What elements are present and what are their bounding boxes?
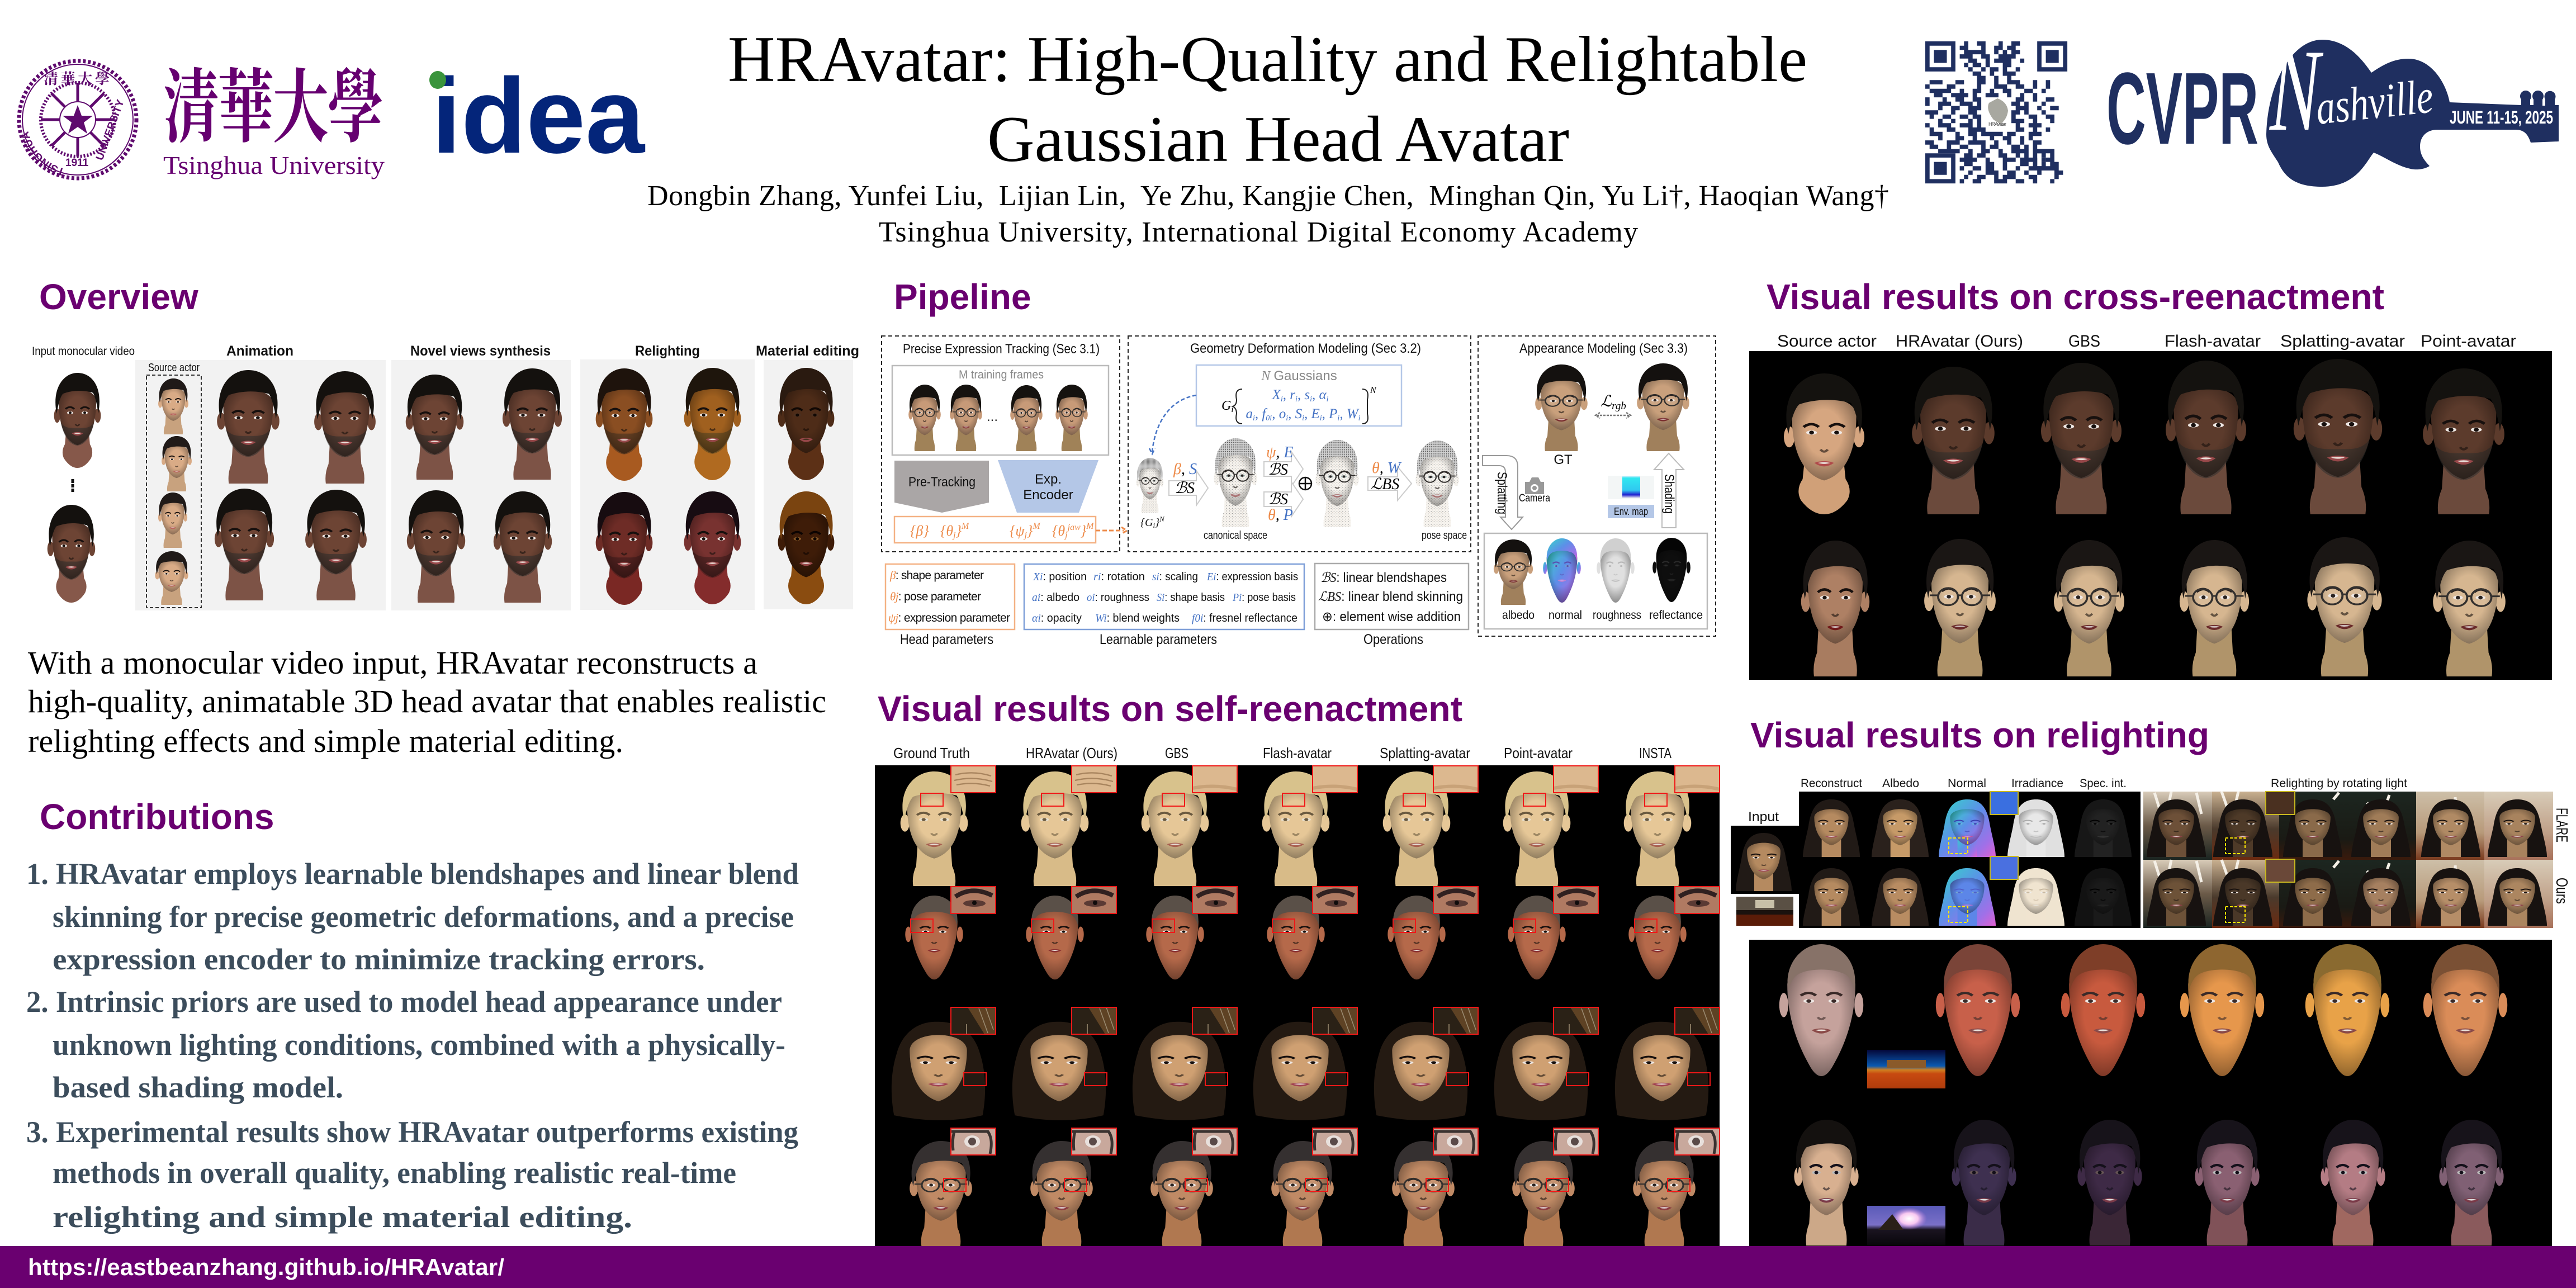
relighting column labels: Input — [1748, 809, 1779, 825]
self-reenactment results panel — [875, 765, 1720, 1246]
pipeline figure — [882, 336, 1716, 647]
contributions list: unknown lighting conditions, combined with a physically- — [53, 1028, 785, 1062]
N Gaussians box: i — [1327, 395, 1329, 404]
pipeline section titles: Precise Expression Tracking (Sec 3.1) — [903, 342, 1100, 357]
deformation labels: ℒBS — [1371, 476, 1399, 493]
deformation captions: } — [1155, 517, 1159, 529]
legend: operations: ⊕: element wise addition — [1322, 609, 1461, 624]
self-reenactment column labels: INSTA — [1639, 745, 1672, 761]
N Gaussians box: i — [1281, 395, 1283, 404]
N Gaussians box: , W — [1339, 406, 1360, 422]
N Gaussians box: , f — [1255, 406, 1267, 422]
FLARE relit faces — [2147, 799, 2547, 857]
relighting column labels: Irradiance — [2011, 777, 2063, 790]
legend: learnable parameters: Ei: expression basis — [1206, 571, 1298, 583]
animation faces — [215, 370, 376, 600]
N Gaussians box: , E — [1304, 406, 1320, 422]
intrinsic maps box — [1484, 533, 1707, 629]
relighting column labels — [1748, 777, 2407, 825]
pipeline dashed sections — [882, 336, 1716, 636]
N Gaussians box: i — [1231, 405, 1234, 414]
heading: Pipeline: Pipeline — [894, 277, 1031, 317]
point cloud heads — [1137, 438, 1459, 527]
legend: learnable parameters: αi: opacity — [1032, 612, 1082, 624]
legend: learnable parameters: Wi: blend weights — [1095, 612, 1180, 624]
overview figure — [32, 343, 859, 610]
splatting arrow: Splatting — [1494, 472, 1509, 514]
N Gaussians box: 0i — [1266, 414, 1272, 423]
N Gaussians box: a — [1246, 406, 1253, 422]
overview description — [28, 645, 826, 759]
GT and prediction faces: ℒ — [1600, 393, 1612, 410]
normal map insets — [1990, 792, 2018, 879]
self-reenactment column labels: Point-avatar — [1504, 745, 1573, 761]
cross row 2 faces — [1801, 537, 2506, 676]
logo: CVPR Nashville guitar: N — [2269, 26, 2323, 155]
row 1 faces — [901, 771, 1691, 886]
method labels FLARE and Ours: FLARE — [2553, 808, 2570, 842]
pre-tracking block — [894, 461, 989, 513]
N Gaussians box: , r — [1283, 387, 1295, 402]
N Gaussians box: , α — [1312, 387, 1327, 402]
logo: idea: idea — [432, 56, 646, 176]
camera icon — [1519, 477, 1550, 504]
deformation captions: {G — [1140, 517, 1153, 529]
cross-reenactment column labels: HRAvatar (Ours) — [1896, 332, 2023, 351]
legend: learnable parameters: f0i: fresnel reflectance — [1192, 612, 1298, 624]
deformation captions: canonical space — [1204, 529, 1267, 542]
relighting column labels: Spec. int. — [2080, 777, 2127, 790]
legend: learnable parameters: si: scaling — [1152, 571, 1198, 583]
logo: Tsinghua University wordmark: 清華大學 — [163, 64, 383, 153]
legend: learnable parameters: oi: roughness — [1087, 591, 1149, 604]
cross-reenactment results panel — [1749, 351, 2552, 680]
shading arrow — [1654, 453, 1684, 528]
contributions list: skinning for precise geometric deformations, and a precise — [53, 900, 794, 934]
relighting intrinsic decomposition panel — [1799, 792, 2141, 928]
QR code: HRAvatar — [1988, 121, 2006, 127]
heading: relighting: Visual results on relighting — [1750, 715, 2209, 755]
overview column labels: Novel views synthesis — [410, 343, 551, 359]
deformation captions — [1140, 515, 1467, 542]
title — [728, 23, 1807, 176]
material editing faces — [778, 368, 834, 604]
relighting faces — [596, 368, 741, 605]
legend: head parameters: Head parameters — [900, 632, 993, 647]
self-reenactment column labels: GBS — [1165, 745, 1188, 761]
footer bar with project URL — [0, 1246, 2576, 1288]
legend: head parameters: θj: pose parameter — [890, 590, 981, 603]
environment map — [1608, 476, 1654, 518]
intrinsic maps box: normal — [1549, 609, 1582, 622]
parameters orange box: j — [1024, 531, 1027, 540]
overview description: high-quality, animatable 3D head avatar that enables realistic — [28, 683, 826, 719]
title: Gaussian Head Avatar — [987, 103, 1569, 176]
N Gaussians box: i — [1302, 414, 1304, 423]
purple sky environment map — [1867, 1206, 1945, 1246]
blue dashed arrow — [1149, 395, 1196, 454]
parameters orange box: {θ — [940, 523, 953, 539]
intrinsic maps box: roughness — [1593, 609, 1641, 622]
parameters orange box — [894, 517, 1096, 543]
deformation labels: θ, W — [1372, 460, 1402, 477]
row 4 faces — [910, 1141, 1696, 1246]
logo: CVPR Nashville guitar: ashville — [2313, 69, 2436, 135]
Ours row decomposition — [1803, 868, 2132, 926]
cross-reenactment column labels: Flash-avatar — [2165, 332, 2261, 351]
shading arrow: Shading — [1661, 474, 1677, 514]
row 2 zoom insets — [911, 887, 1720, 932]
deformation captions: N — [1159, 515, 1165, 523]
GT and prediction faces: GT — [1554, 452, 1573, 467]
N Gaussians box: i — [1337, 414, 1339, 423]
parameters orange box: M — [1032, 522, 1041, 531]
overview description: relighting effects and simple material editing. — [28, 723, 623, 759]
logo: Tsinghua seal: 1911 — [65, 157, 89, 169]
row 4 zoom insets — [944, 1128, 1720, 1191]
N Gaussians box: i — [1253, 414, 1255, 423]
normal map dashed selections — [1949, 838, 1968, 922]
contributions list: 1. HRAvatar employs learnable blendshapes and linear blend — [26, 857, 799, 891]
heading: cross-reenactment: Visual results on cross-reenactment — [1767, 277, 2384, 317]
contributions list: expression encoder to minimize tracking errors. — [53, 943, 705, 976]
legend: learnable parameters: ri: rotation — [1093, 571, 1145, 583]
heading: Overview: Overview — [39, 277, 198, 317]
intrinsic maps box: reflectance — [1649, 609, 1703, 622]
M training frames box — [892, 366, 1109, 455]
Ours relit faces — [2147, 868, 2547, 926]
legend: operations: Operations — [1363, 632, 1423, 647]
authors: Dongbin Zhang, Yunfei Liu, Lijian Lin, Ye Zhu, Kangjie Chen, Minghan Qin, Yu Li†, Haoqian Wang† — [647, 180, 1889, 212]
row 3 zoom insets — [951, 1007, 1720, 1086]
row 1 zoom insets — [921, 766, 1720, 806]
overview column labels: Source actor — [148, 362, 200, 374]
legend: learnable parameters: ai: albedo — [1032, 591, 1079, 604]
relighting column labels: Normal — [1948, 777, 1986, 790]
input video faces — [48, 373, 101, 603]
N Gaussians box: , S — [1288, 406, 1303, 422]
method labels FLARE and Ours — [2553, 808, 2570, 904]
overview description: With a monocular video input, HRAvatar reconstructs a — [28, 645, 757, 681]
legend: head parameters: β: shape parameter — [889, 569, 984, 582]
parameters orange box: j — [952, 531, 956, 540]
strip insets and selections — [2225, 792, 2295, 922]
logo: CVPR Nashville guitar: CVPR — [2106, 51, 2258, 165]
overview column labels: Animation — [226, 343, 293, 359]
input image and environment thumbnail — [1731, 826, 1799, 926]
logo: Tsinghua University wordmark: Tsinghua University — [163, 151, 385, 179]
parameters orange box: {β} — [910, 523, 929, 539]
deformation captions: pose space — [1422, 529, 1467, 542]
logo: Tsinghua seal: UNIVERSITY — [94, 98, 127, 162]
contributions list: methods in overall quality, enabling realistic real-time — [53, 1156, 736, 1190]
contributions list: 2. Intrinsic priors are used to model head appearance under — [26, 985, 782, 1019]
parameters orange box: j — [1064, 531, 1068, 540]
N Gaussians box: N Gaussians — [1261, 368, 1337, 383]
cross row 1 faces — [1784, 359, 2504, 514]
self-reenactment column labels: Ground Truth — [893, 745, 970, 761]
N Gaussians box: , P — [1322, 406, 1337, 422]
environment relighting panel — [1749, 940, 2552, 1246]
parameters orange box: M — [961, 522, 970, 531]
self-reenactment column labels: Splatting-avatar — [1380, 745, 1470, 761]
camera icon: Camera — [1519, 493, 1550, 504]
night environment map — [1867, 1050, 1945, 1088]
relit young man row — [1794, 1120, 2504, 1246]
deformation labels: ψ, E — [1266, 444, 1294, 461]
legend: learnable parameters: Learnable parameters — [1100, 632, 1217, 647]
parameters orange box: } — [1081, 523, 1087, 539]
N Gaussians box: i — [1286, 414, 1288, 423]
deformation labels: ℬS — [1268, 491, 1288, 508]
cross-reenactment column labels — [1777, 332, 2516, 351]
pipeline section titles: Geometry Deformation Modeling (Sec 3.2) — [1190, 341, 1421, 356]
parameters orange box: {θ — [1052, 523, 1065, 539]
N Gaussians box: i — [1358, 414, 1361, 423]
relighting column labels: Albedo — [1882, 777, 1919, 790]
cross-reenactment column labels: Point-avatar — [2421, 332, 2516, 351]
parameters orange box: {ψ — [1010, 523, 1025, 539]
pre-tracking block: Pre-Tracking — [908, 475, 976, 490]
deformation labels: θ, P — [1268, 506, 1293, 524]
N Gaussians box: i — [1320, 414, 1322, 423]
deformation captions: i — [1153, 521, 1155, 529]
overview column labels: Input monocular video — [32, 345, 135, 358]
logo: Tsinghua seal: 清華大學 — [44, 68, 110, 88]
N Gaussians box: X — [1272, 387, 1281, 402]
parameters orange box: } — [1027, 523, 1033, 539]
expression encoder block — [998, 460, 1098, 513]
relighting by rotating light strip — [2143, 792, 2553, 928]
pipeline section titles — [903, 341, 1688, 357]
GT and prediction faces — [1535, 363, 1689, 467]
contributions list — [26, 857, 799, 1234]
row 2 faces — [905, 896, 1687, 979]
orange dashed arrow — [1096, 527, 1127, 534]
FLARE row decomposition — [1803, 799, 2132, 857]
expression encoder block: Exp. — [1035, 472, 1062, 487]
legend: operations: ℬS: linear blendshapes — [1320, 570, 1447, 585]
relighting column labels: Relighting by rotating light — [2271, 777, 2407, 790]
self-reenactment column labels: HRAvatar (Ours) — [1026, 745, 1117, 761]
overview column labels — [32, 343, 859, 374]
deformation labels — [1173, 444, 1402, 524]
splatting arrow — [1483, 456, 1523, 529]
contributions list: based shading model. — [53, 1071, 343, 1104]
heading: self-reenactment: Visual results on self-reenactment — [878, 689, 1462, 729]
logo: Tsinghua seal — [17, 59, 139, 180]
deformation labels: β, S — [1173, 461, 1197, 478]
relit man row — [1779, 944, 2507, 1076]
N Gaussians box: N — [1370, 386, 1377, 395]
logo: CVPR Nashville guitar — [2106, 26, 2559, 187]
novel view faces — [406, 368, 562, 603]
parameters orange box: } — [956, 523, 962, 539]
legend: head parameters: ψj: expression parameter — [888, 611, 1010, 624]
title: HRAvatar: High-Quality and Relightable — [728, 23, 1807, 96]
M training frames box: ... — [987, 409, 998, 424]
N Gaussians box — [1196, 365, 1401, 426]
overview column labels: Material editing — [756, 343, 859, 359]
legend: learnable parameters: Xi: position — [1033, 571, 1087, 583]
M training frames box: M training frames — [959, 368, 1044, 381]
overview column labels: Relighting — [635, 343, 700, 359]
GT and prediction faces: rgb — [1612, 400, 1626, 412]
legend: learnable parameters: Si: shape basis — [1157, 591, 1225, 604]
legend: operations: ℒBS: linear blend skinning — [1318, 589, 1463, 604]
footer bar with project URL: https://eastbeanzhang.github.io/HRAvatar/ — [28, 1254, 504, 1280]
N Gaussians box: i — [1310, 395, 1312, 404]
overview panel backgrounds — [135, 359, 853, 610]
N Gaussians box: , o — [1272, 406, 1286, 422]
QR code — [1925, 41, 2067, 183]
expression encoder block: Encoder — [1023, 487, 1073, 503]
deformation labels: ℬS — [1268, 461, 1288, 479]
N Gaussians box: i — [1295, 395, 1298, 404]
cross-reenactment column labels: GBS — [2068, 332, 2100, 351]
contributions list: relighting and simple material editing. — [53, 1200, 632, 1234]
self-reenactment column labels — [893, 745, 1672, 761]
parameters orange box: M — [1086, 522, 1095, 531]
legend: learnable parameters — [1024, 564, 1304, 647]
element wise addition sign — [1299, 477, 1311, 490]
logo: Tsinghua seal: TSINGHUA — [22, 131, 63, 176]
environment map: Env. map — [1614, 506, 1648, 517]
deformation block arrows — [1169, 452, 1412, 517]
deformation labels: ℬS — [1175, 480, 1195, 497]
cross-reenactment column labels: Splatting-avatar — [2280, 332, 2405, 351]
contributions list: 3. Experimental results show HRAvatar outperforms existing — [26, 1115, 798, 1149]
parameters orange box: jaw — [1067, 523, 1081, 532]
method labels FLARE and Ours: Ours — [2553, 878, 2570, 904]
self-reenactment column labels: Flash-avatar — [1263, 745, 1332, 761]
source actor dashed box — [146, 375, 201, 608]
N Gaussians box: , s — [1298, 387, 1310, 402]
legend: operations — [1315, 564, 1469, 647]
row 3 faces — [892, 1022, 1708, 1120]
heading: Contributions: Contributions — [40, 797, 274, 837]
intrinsic maps box: albedo — [1502, 609, 1535, 622]
N Gaussians box: G — [1221, 399, 1231, 413]
cross-reenactment column labels: Source actor — [1777, 332, 1877, 351]
pipeline section titles: Appearance Modeling (Sec 3.3) — [1519, 341, 1688, 356]
legend: learnable parameters: Pi: pose basis — [1232, 591, 1296, 604]
relighting column labels: Reconstruct — [1801, 777, 1862, 790]
legend: head parameters — [886, 564, 1015, 647]
affiliations: Tsinghua University, International Digital Economy Academy — [879, 216, 1638, 248]
